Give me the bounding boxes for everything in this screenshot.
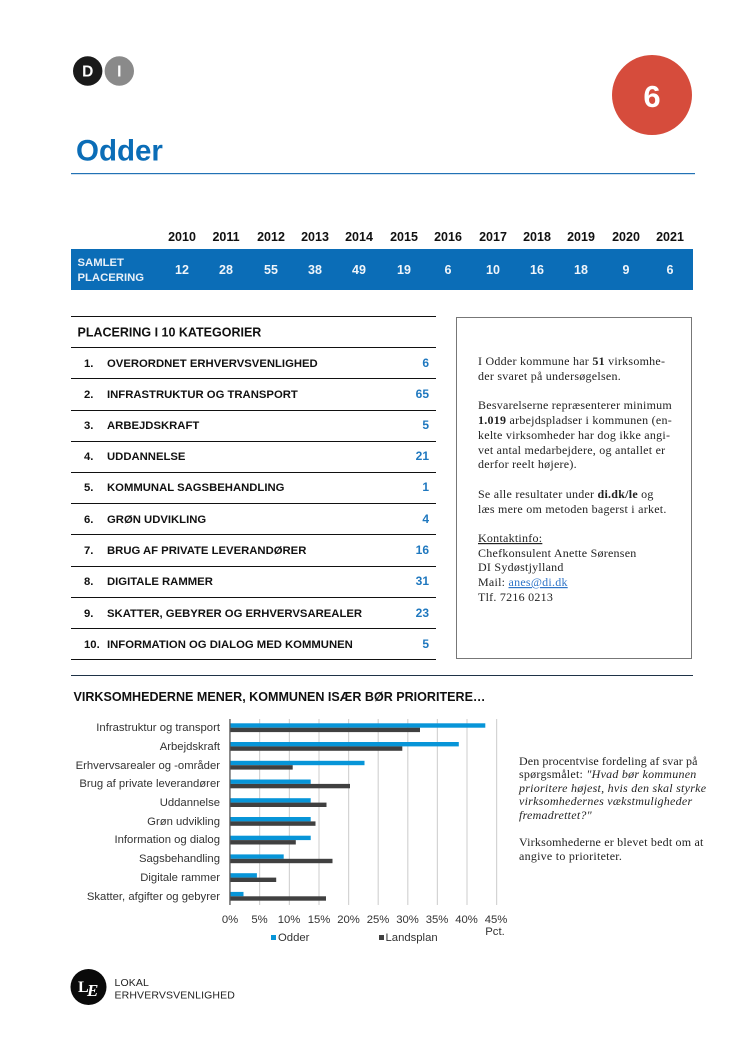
panel: placering i 10 kategorier: 1.: [84, 358, 93, 370]
panel: placering i 10 kategorier: 4.: [84, 451, 93, 463]
panel: placering i 10 kategorier: 3.: [84, 420, 93, 432]
chart note: virksomhedernes vækstmuligheder: [519, 794, 692, 808]
year headers: 2010: [168, 230, 196, 244]
panel: info box: Mail: anes@di.dk: [478, 575, 568, 589]
panel: placering i 10 kategorier: GRØN UDVIKLING: [107, 514, 206, 526]
year headers: 2017: [479, 230, 507, 244]
chart heading: VIRKSOMHEDERNE MENER, KOMMUNEN ISÆR BØR PRIORITERE…: [74, 690, 485, 704]
panel: overall ranking band: 10: [486, 263, 500, 277]
year headers: 2018: [523, 230, 551, 244]
panel: overall ranking band: 49: [352, 263, 366, 277]
bar chart: Sagsbehandling: [139, 853, 220, 865]
rank badge: [612, 55, 692, 135]
bar chart: 10%: [278, 914, 300, 926]
panel: overall ranking band: 19: [397, 263, 411, 277]
chart note: prioritere højest, hvis den skal styrke: [518, 781, 707, 795]
panel: overall ranking band: 9: [623, 263, 630, 277]
year headers: 2016: [434, 230, 462, 244]
chart note: angive to prioriteter.: [519, 849, 622, 863]
bar chart: 5%: [251, 914, 268, 926]
panel: placering i 10 kategorier: 23: [416, 606, 429, 620]
panel: info box: Tlf. 7216 0213: [478, 590, 553, 604]
panel: placering i 10 kategorier: 5: [422, 637, 429, 651]
bar chart: Grøn udvikling: [147, 816, 220, 828]
logo: lokal erhvervsvenlighed: LOKAL: [114, 977, 149, 989]
panel: placering i 10 kategorier: INFRASTRUKTUR OG TRANSPORT: [107, 389, 298, 401]
logo: DI: [73, 56, 134, 86]
year headers: 2019: [567, 230, 595, 244]
bar chart: 0%: [222, 914, 238, 926]
bar chart: Infrastruktur og transport: [96, 722, 221, 734]
panel: info box: Besvarelserne repræsenterer minimum: [478, 398, 672, 412]
logo: lokal erhvervsvenlighed: ERHVERVSVENLIGHED: [114, 990, 235, 1002]
year headers: 2020: [612, 230, 640, 244]
chart note: fremadrettet?": [519, 808, 593, 822]
bar chart: Uddannelse: [160, 797, 220, 809]
panel: overall ranking band: 12: [175, 263, 189, 277]
panel: overall ranking band: PLACERING: [78, 272, 144, 284]
bar chart: Landsplan: [386, 932, 438, 944]
panel: placering i 10 kategorier: ARBEJDSKRAFT: [107, 420, 199, 432]
panel: placering i 10 kategorier: 8.: [84, 576, 93, 588]
panel: placering i 10 kategorier: [71, 316, 436, 660]
panel: overall ranking band: 55: [264, 263, 278, 277]
panel: info box: derfor reelt højere).: [478, 457, 577, 471]
panel: info box: I Odder kommune har 51 virksomhe-: [478, 354, 665, 368]
panel: overall ranking band: 18: [574, 263, 588, 277]
bar chart: Odder: [278, 932, 310, 944]
panel: placering i 10 kategorier: 16: [416, 543, 429, 557]
logo: DI: D: [82, 64, 93, 80]
year headers: 2015: [390, 230, 418, 244]
rank badge: 6: [643, 79, 661, 114]
panel: placering i 10 kategorier: 2.: [84, 389, 93, 401]
panel: placering i 10 kategorier: 10.: [84, 639, 100, 651]
logo: lokal erhvervsvenlighed: [70, 969, 235, 1005]
panel: placering i 10 kategorier: 1: [422, 480, 429, 494]
year headers: 2021: [656, 230, 684, 244]
panel: placering i 10 kategorier: INFORMATION OG DIALOG MED KOMMUNEN: [107, 639, 353, 651]
panel: info box: vet antal medarbejdere, og antallet er: [478, 443, 665, 457]
bar chart: 30%: [396, 914, 419, 926]
panel: info box: læs mere om metoden bagerst i arket.: [478, 502, 667, 516]
panel: placering i 10 kategorier: 6.: [84, 514, 93, 526]
panel: placering i 10 kategorier: SKATTER, GEBYRER OG ERHVERVSAREALER: [107, 608, 362, 620]
year headers: 2012: [257, 230, 285, 244]
panel: info box: [456, 318, 692, 658]
panel: overall ranking band: 38: [308, 263, 322, 277]
bar chart: Erhvervsarealer og -områder: [76, 760, 220, 772]
panel: placering i 10 kategorier: DIGITALE RAMMER: [107, 576, 213, 588]
panel: info box: DI Sydøstjylland: [478, 560, 564, 574]
panel: overall ranking band: 6: [667, 263, 674, 277]
panel: overall ranking band: [71, 249, 693, 290]
panel: placering i 10 kategorier: 65: [416, 387, 429, 401]
panel: placering i 10 kategorier: 9.: [84, 608, 93, 620]
bar chart: Arbejdskraft: [160, 741, 221, 753]
panel: placering i 10 kategorier: UDDANNELSE: [107, 451, 186, 463]
year headers: 2013: [301, 230, 329, 244]
panel: placering i 10 kategorier: BRUG AF PRIVATE LEVERANDØRER: [107, 545, 306, 557]
chart note: [518, 754, 707, 863]
chart note: spørgsmålet: "Hvad bør kommunen: [519, 767, 697, 781]
logo: lokal erhvervsvenlighed: L: [78, 979, 89, 996]
bar chart: Skatter, afgifter og gebyrer: [87, 891, 220, 903]
panel: info box: 1.019 arbejdspladser i kommunen (en-: [478, 413, 672, 427]
panel: placering i 10 kategorier: 4: [422, 512, 429, 526]
panel: overall ranking band: 28: [219, 263, 233, 277]
bar chart: Brug af private leverandører: [79, 778, 220, 790]
panel: placering i 10 kategorier: 31: [416, 574, 429, 588]
bar chart: 20%: [337, 914, 360, 926]
panel: placering i 10 kategorier: PLACERING I 10 KATEGORIER: [78, 326, 261, 340]
panel: placering i 10 kategorier: 5: [422, 418, 429, 432]
chart note: Den procentvise fordeling af svar på: [519, 754, 698, 768]
bar chart: [76, 719, 507, 944]
bar chart: 25%: [367, 914, 389, 926]
panel: placering i 10 kategorier: KOMMUNAL SAGSBEHANDLING: [107, 482, 285, 494]
bar chart: Digitale rammer: [140, 872, 220, 884]
panel: placering i 10 kategorier: 5.: [84, 482, 93, 494]
panel: overall ranking band: 16: [530, 263, 544, 277]
chart note: Virksomhederne er blevet bedt om at: [519, 835, 704, 849]
panel: placering i 10 kategorier: OVERORDNET ERHVERVSVENLIGHED: [107, 358, 318, 370]
logo: DI: I: [117, 64, 121, 80]
panel: placering i 10 kategorier: 21: [416, 449, 429, 463]
bar chart: 35%: [426, 914, 448, 926]
panel: placering i 10 kategorier: 7.: [84, 545, 93, 557]
panel: info box: Chefkonsulent Anette Sørensen: [478, 546, 637, 560]
bar chart: 15%: [308, 914, 330, 926]
panel: overall ranking band: 6: [445, 263, 452, 277]
panel: placering i 10 kategorier: 6: [422, 356, 429, 370]
year headers: 2011: [212, 230, 240, 244]
logo: lokal erhvervsvenlighed: E: [86, 981, 98, 1000]
panel: overall ranking band: SAMLET: [78, 257, 124, 269]
panel: info box: kelte virksomheder har dog ikke angi-: [478, 428, 670, 442]
panel: info box: Se alle resultater under di.dk/le og: [478, 487, 654, 501]
bar chart: Pct.: [485, 926, 505, 938]
bar chart: Information og dialog: [114, 834, 220, 846]
bar chart: 45%: [485, 914, 507, 926]
bar chart: 40%: [455, 914, 478, 926]
year headers: 2014: [345, 230, 373, 244]
title: Odder: [76, 134, 163, 168]
panel: info box: Kontaktinfo:: [478, 531, 542, 545]
year headers: [168, 230, 684, 244]
panel: info box: der svaret på undersøgelsen.: [478, 369, 621, 383]
